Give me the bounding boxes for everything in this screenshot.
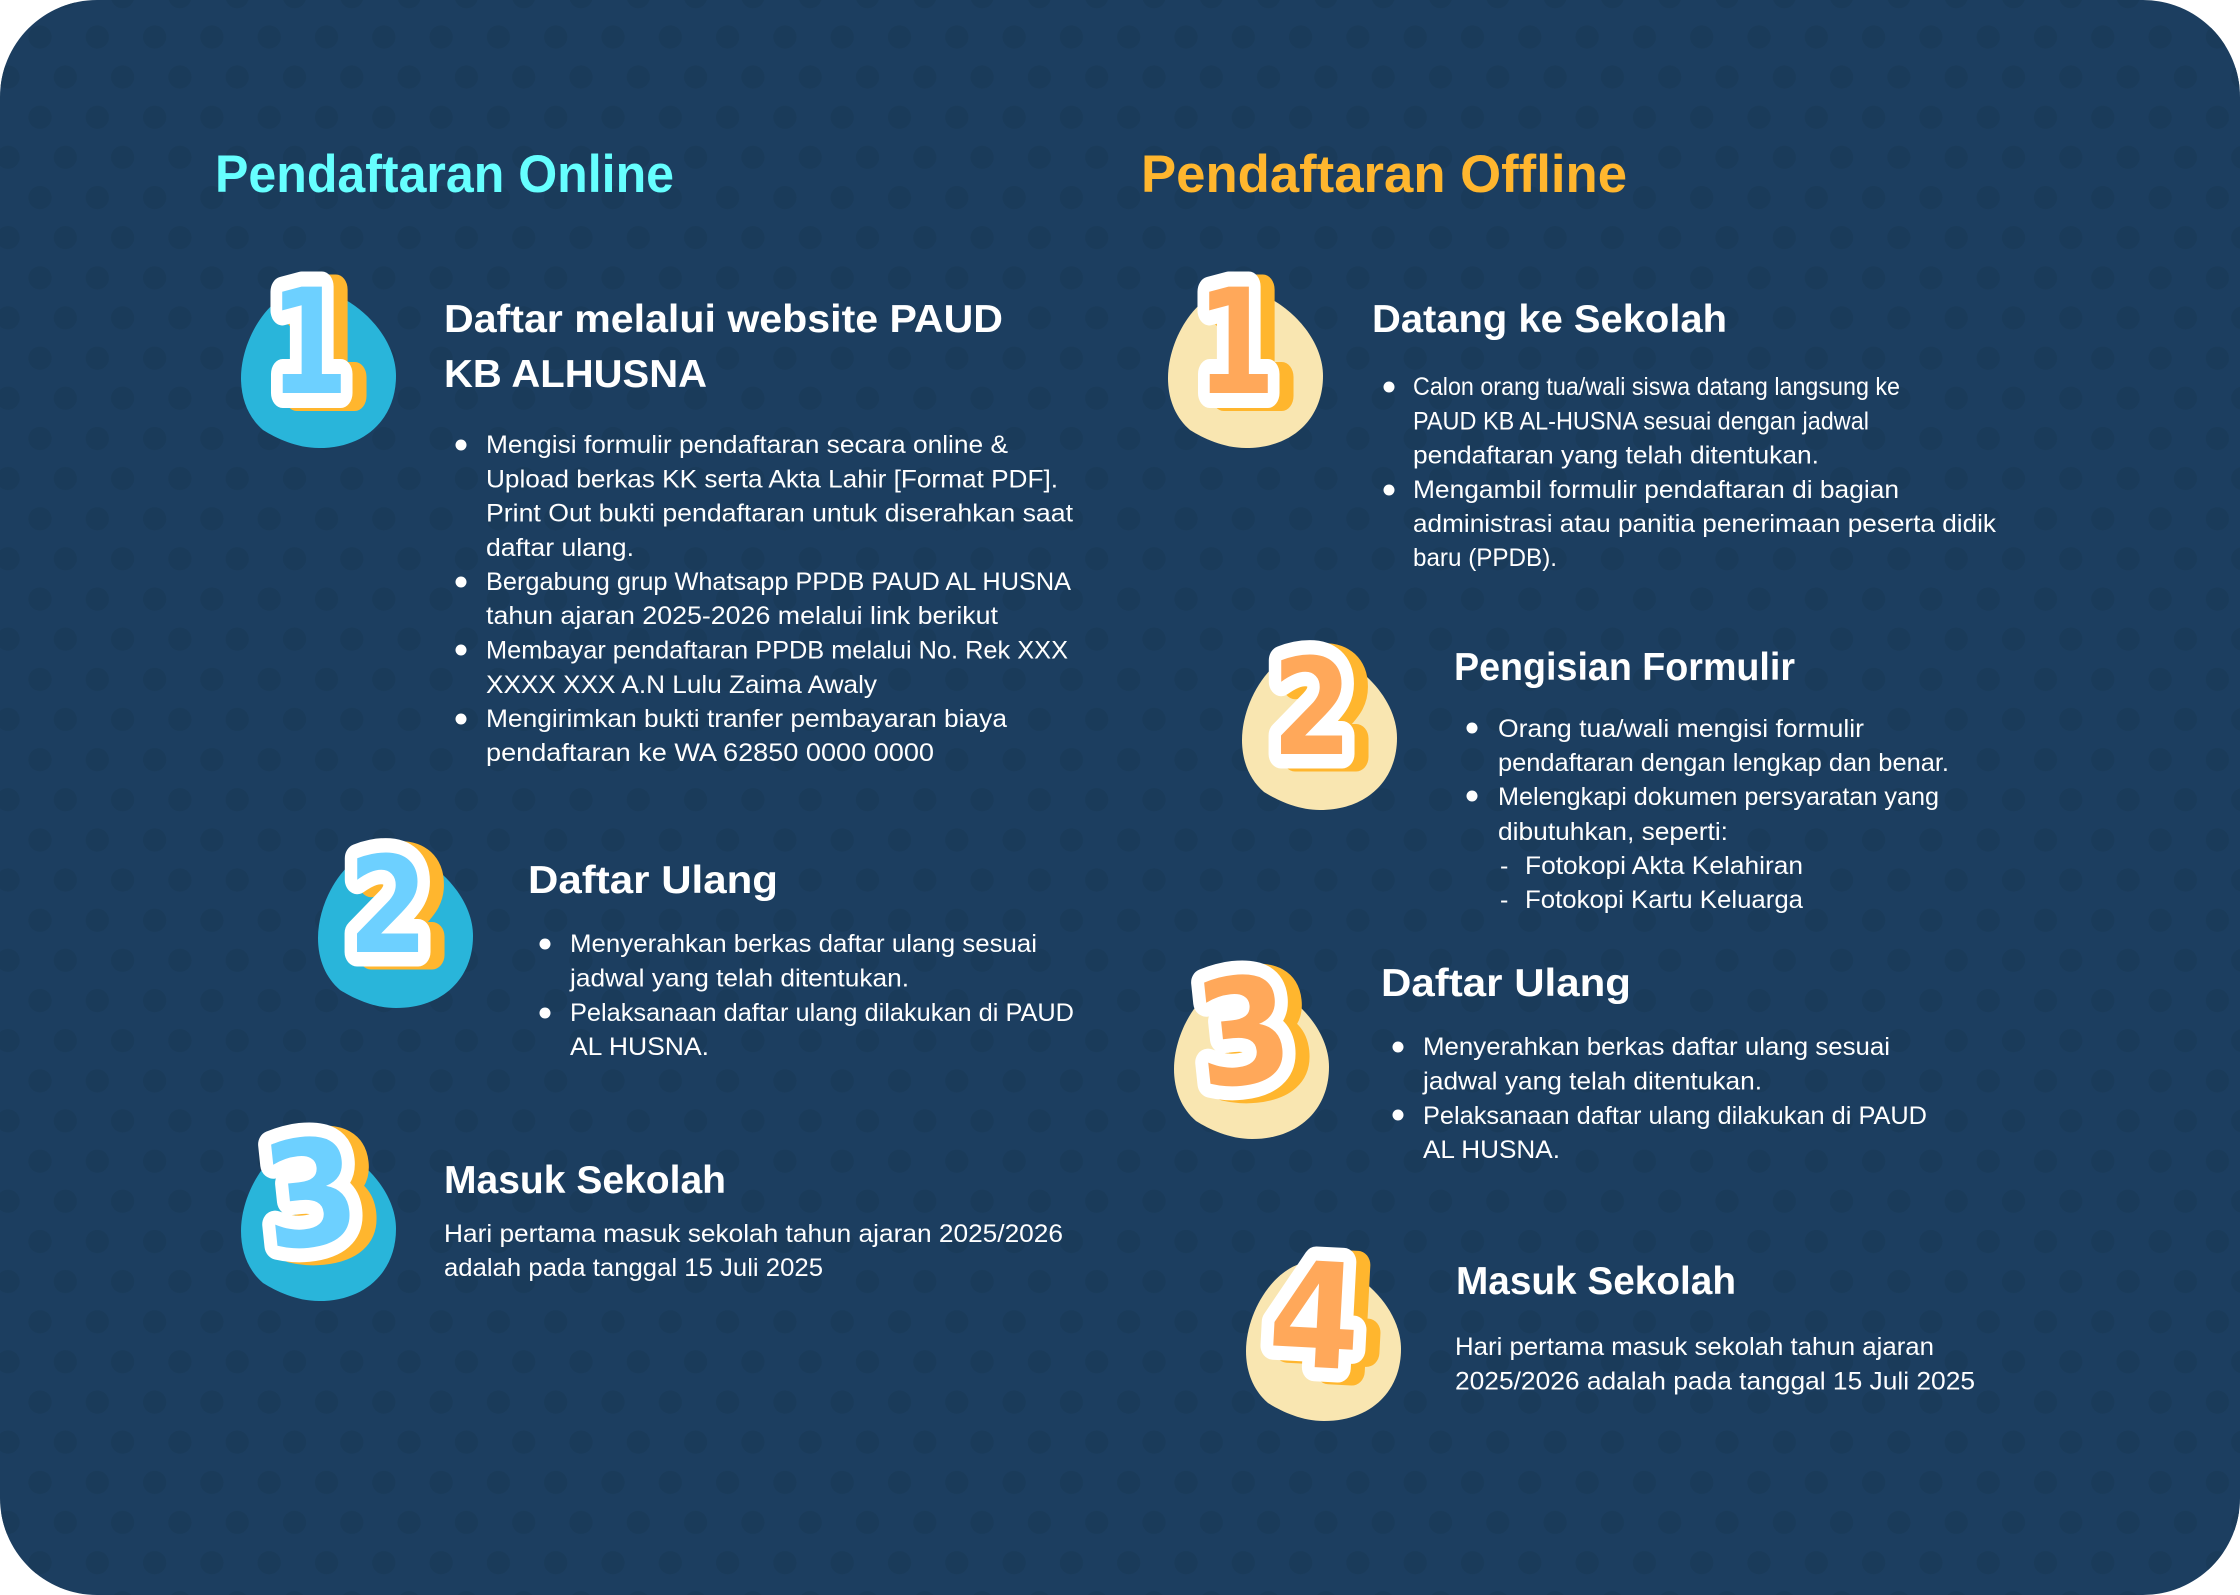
bullet list: administrasi atau panitia penerimaan peserta didik bbox=[1413, 510, 1997, 538]
bullet list: PAUD KB AL-HUSNA sesuai dengan jadwal bbox=[1413, 408, 1869, 436]
bullet list: daftar ulang. bbox=[486, 534, 634, 562]
icon: number 2 blue: 2 bbox=[348, 829, 428, 984]
title: Pendaftaran Online: Pendaftaran Online bbox=[215, 145, 674, 204]
bullet list: Membayar pendaftaran PPDB melalui No. Rek XXX bbox=[486, 636, 1068, 664]
text block: Hari pertama masuk sekolah tahun ajaran 2025/2026 bbox=[444, 1220, 1063, 1248]
panel: offline step 2 bbox=[1242, 631, 1949, 914]
bullet list: AL HUSNA. bbox=[570, 1033, 709, 1061]
bullet list: Fotokopi Akta Kelahiran bbox=[1525, 852, 1803, 880]
icon: number 2 blue: 2 bbox=[362, 832, 442, 987]
icon: number 1 orange: 1 bbox=[1196, 257, 1276, 428]
bullet list: Mengisi formulir pendaftaran secara online & bbox=[486, 431, 1008, 459]
bullet list: pendaftaran yang telah ditentukan. bbox=[1413, 442, 1819, 470]
bullet list: Menyerahkan berkas daftar ulang sesuai bbox=[570, 930, 1037, 958]
bullet list bbox=[456, 431, 1073, 767]
icon: number 4 orange: 4 bbox=[1279, 1232, 1379, 1407]
bullet list bbox=[1466, 715, 1949, 914]
icon: number 3 blue: 3 bbox=[255, 1105, 367, 1285]
bullet list: Pelaksanaan daftar ulang dilakukan di PAUD bbox=[1423, 1102, 1927, 1130]
heading: Daftar Ulang bbox=[1381, 962, 1631, 1005]
bullet list: Mengirimkan bukti tranfer pembayaran biaya bbox=[486, 705, 1007, 733]
icon: number 3 orange: 3 bbox=[1202, 946, 1314, 1126]
text block bbox=[1455, 1333, 1975, 1396]
icon: number 1 blue bbox=[241, 257, 396, 448]
bullet list: AL HUSNA. bbox=[1423, 1136, 1560, 1164]
heading: Masuk Sekolah bbox=[444, 1159, 726, 1202]
bullet list: Menyerahkan berkas daftar ulang sesuai bbox=[1423, 1033, 1890, 1061]
bullet list: pendaftaran dengan lengkap dan benar. bbox=[1498, 749, 1949, 777]
bullet list: baru (PPDB). bbox=[1413, 544, 1557, 572]
heading bbox=[444, 298, 1003, 396]
panel: offline step 3 bbox=[1174, 943, 1927, 1164]
bullet list: Print Out bukti pendaftaran untuk diserahkan saat bbox=[486, 500, 1073, 528]
bullet list: Calon orang tua/wali siswa datang langsung ke bbox=[1413, 373, 1900, 401]
heading: Daftar Ulang bbox=[528, 859, 778, 902]
bullet list: Orang tua/wali mengisi formulir bbox=[1498, 715, 1864, 743]
bullet list: Pelaksanaan daftar ulang dilakukan di PAUD bbox=[570, 999, 1074, 1027]
bullet list: jadwal yang telah ditentukan. bbox=[1422, 1068, 1762, 1096]
text block: adalah pada tanggal 15 Juli 2025 bbox=[444, 1254, 823, 1282]
icon: number 4 orange: 4 bbox=[1265, 1229, 1365, 1404]
panel: online step 2 bbox=[318, 829, 1074, 1061]
bullet list: Fotokopi Kartu Keluarga bbox=[1525, 886, 1803, 914]
text block: Hari pertama masuk sekolah tahun ajaran bbox=[1455, 1333, 1934, 1361]
bullet list bbox=[1384, 373, 1997, 572]
bullet list: Mengambil formulir pendaftaran di bagian bbox=[1413, 476, 1899, 504]
icon: number 2 orange: 2 bbox=[1272, 631, 1352, 786]
panel: online step 3 bbox=[241, 1105, 1063, 1301]
text block: 2025/2026 adalah pada tanggal 15 Juli 2025 bbox=[1455, 1368, 1975, 1396]
heading: Daftar melalui website PAUD bbox=[444, 298, 1003, 341]
bullet list: dibutuhkan, seperti: bbox=[1498, 818, 1728, 846]
icon: number 3 orange: 3 bbox=[1188, 943, 1300, 1123]
bullet list: Melengkapi dokumen persyaratan yang bbox=[1498, 783, 1939, 811]
bullet list: XXXX XXX A.N Lulu Zaima Awaly bbox=[486, 671, 878, 699]
icon: number 1 orange: 1 bbox=[1210, 260, 1290, 431]
bullet list bbox=[1392, 1033, 1927, 1164]
heading: Datang ke Sekolah bbox=[1372, 298, 1727, 341]
title: Pendaftaran Offline: Pendaftaran Offline bbox=[1141, 145, 1627, 204]
text block bbox=[444, 1220, 1063, 1282]
icon: number 2 blue bbox=[318, 829, 473, 1008]
icon: number 3 orange bbox=[1174, 943, 1329, 1139]
bullet list: - bbox=[1500, 852, 1508, 880]
panel: offline step 1 bbox=[1168, 257, 1997, 572]
icon: number 3 blue: 3 bbox=[269, 1108, 381, 1288]
icon: number 1 blue: 1 bbox=[283, 260, 363, 431]
icon: number 1 blue: 1 bbox=[269, 257, 349, 428]
icon: number 2 blue: 2 bbox=[348, 829, 428, 984]
bullet list: Upload berkas KK serta Akta Lahir [Format PDF]. bbox=[486, 466, 1058, 494]
icon: number 2 orange: 2 bbox=[1286, 634, 1366, 789]
panel: offline step 4 bbox=[1246, 1229, 1975, 1421]
heading: KB ALHUSNA bbox=[444, 353, 707, 396]
icon: number 3 orange: 3 bbox=[1188, 943, 1300, 1123]
icon: number 2 orange bbox=[1242, 631, 1397, 810]
bullet list: pendaftaran ke WA 62850 0000 0000 bbox=[486, 739, 934, 767]
panel: online step 1 bbox=[241, 257, 1073, 767]
icon: number 3 blue: 3 bbox=[255, 1105, 367, 1285]
bullet list bbox=[540, 930, 1074, 1061]
icon: number 1 orange bbox=[1168, 257, 1323, 448]
icon: number 3 blue bbox=[241, 1105, 396, 1301]
icon: number 4 orange: 4 bbox=[1265, 1229, 1365, 1404]
bullet list: Bergabung grup Whatsapp PPDB PAUD AL HUSNA bbox=[486, 568, 1071, 596]
bullet list: - bbox=[1500, 886, 1508, 914]
bullet list: tahun ajaran 2025-2026 melalui link berikut bbox=[486, 602, 998, 630]
heading: Masuk Sekolah bbox=[1456, 1260, 1736, 1303]
icon: number 2 orange: 2 bbox=[1272, 631, 1352, 786]
icon: number 4 orange bbox=[1246, 1229, 1401, 1421]
icon: number 1 orange: 1 bbox=[1196, 257, 1276, 428]
heading: Pengisian Formulir bbox=[1454, 646, 1795, 689]
icon: number 1 blue: 1 bbox=[269, 257, 349, 428]
bullet list: jadwal yang telah ditentukan. bbox=[569, 964, 909, 992]
